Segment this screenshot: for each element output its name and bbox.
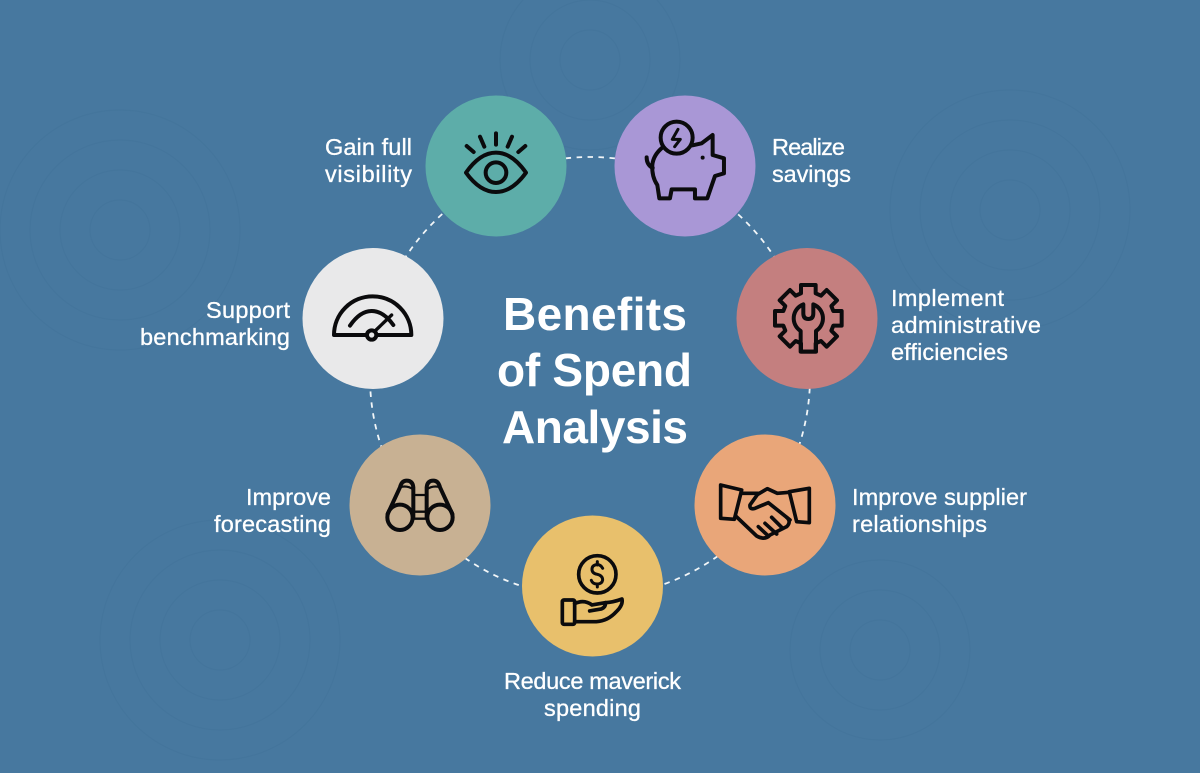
- circle: support benchmarking: [302, 248, 444, 389]
- label: support benchmarking: [140, 297, 290, 350]
- label: realize savings: Realize: [772, 134, 845, 160]
- label: gain full visibility: [325, 134, 412, 187]
- icon: eye: [466, 133, 526, 192]
- circle: improve forecasting: [350, 434, 490, 576]
- title: [497, 288, 692, 453]
- label: implement administrative efficiencies: administrative: [891, 312, 1041, 338]
- label: support benchmarking: benchmarking: [140, 324, 290, 350]
- label: gain full visibility: visibility: [325, 161, 412, 187]
- title: of Spend: [497, 344, 692, 396]
- icon: hand with dollar coin: [562, 556, 622, 624]
- title: Analysis: [502, 401, 688, 453]
- label: realize savings: savings: [772, 161, 851, 187]
- label: improve supplier relationships: relationships: [852, 511, 987, 537]
- title: Benefits: [503, 288, 687, 340]
- label: implement administrative efficiencies: Implement: [891, 285, 1004, 311]
- label: improve forecasting: forecasting: [214, 511, 331, 537]
- circle: implement administrative efficiencies: [736, 248, 878, 389]
- circle: realize savings: [614, 96, 756, 236]
- circle: gain full visibility: [426, 96, 566, 236]
- label: realize savings: [772, 134, 851, 187]
- label: reduce maverick spending: [504, 668, 681, 721]
- label: gain full visibility: Gain full: [325, 134, 412, 160]
- circle: reduce maverick spending: [522, 516, 663, 656]
- label: improve forecasting: Improve: [246, 484, 331, 510]
- label: improve forecasting: [214, 484, 331, 537]
- icon: gear and wrench: [775, 285, 842, 352]
- icon: gauge: [334, 296, 411, 340]
- icon: piggy bank: [647, 122, 724, 198]
- dashed ring connector: [370, 157, 810, 597]
- label: improve supplier relationships: [852, 484, 1027, 537]
- label: implement administrative efficiencies: [891, 285, 1041, 365]
- label: implement administrative efficiencies: efficiencies: [891, 339, 1008, 365]
- label: reduce maverick spending: spending: [544, 695, 641, 721]
- label: support benchmarking: Support: [206, 297, 290, 323]
- icon: binoculars: [387, 481, 453, 530]
- icon: handshake: [721, 485, 809, 538]
- label: improve supplier relationships: Improve supplier: [852, 484, 1027, 510]
- circle: improve supplier relationships: [694, 434, 836, 576]
- label: reduce maverick spending: Reduce maverick: [504, 668, 681, 694]
